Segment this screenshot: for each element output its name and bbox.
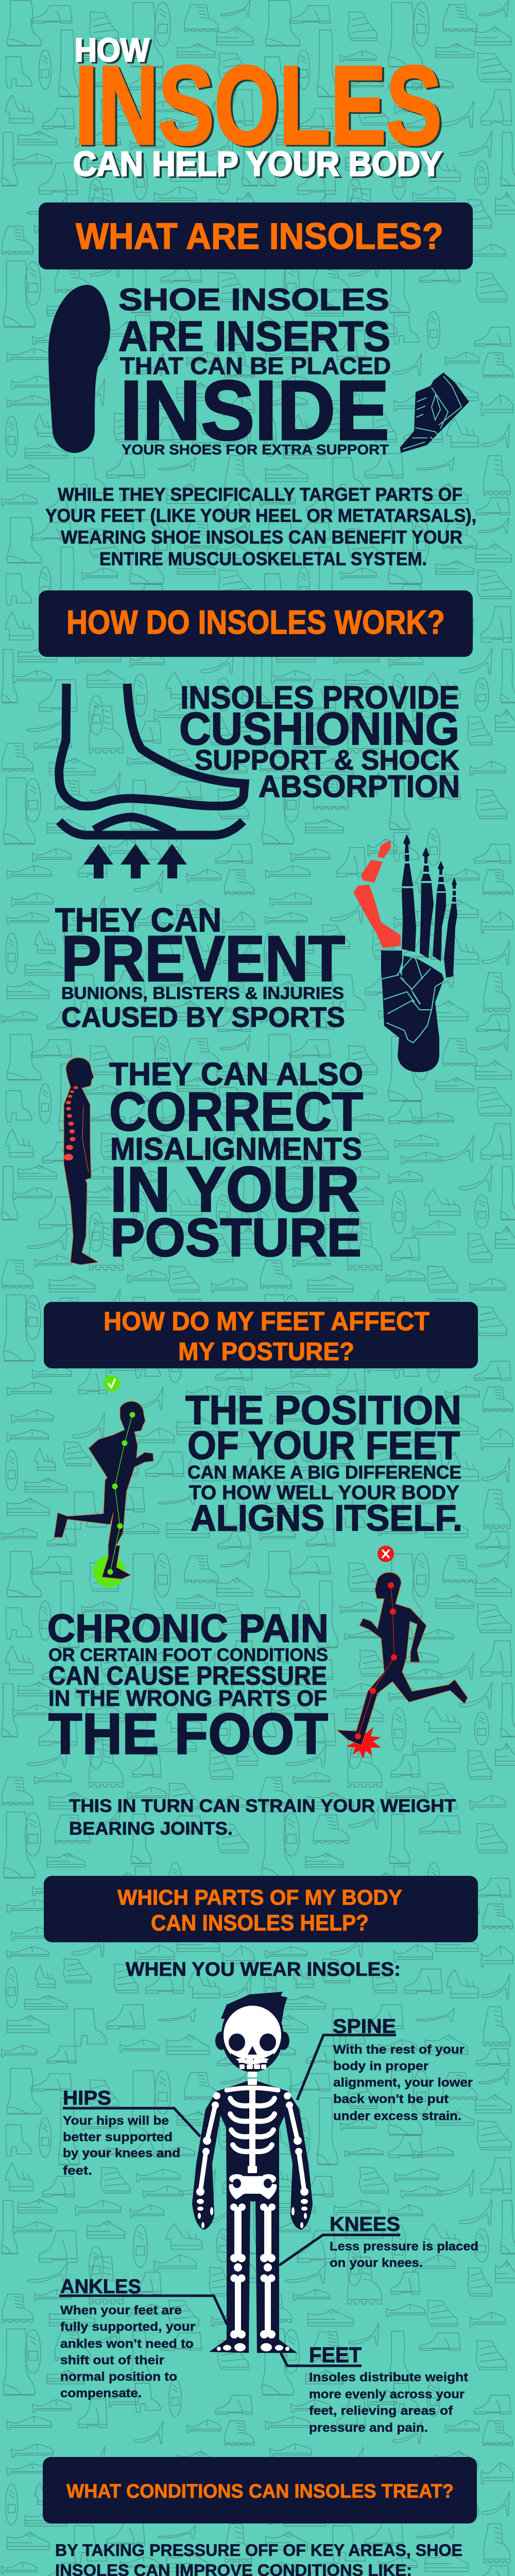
- callout: feet: more evenly across your: [309, 2387, 465, 2401]
- text block: by taking pressure off: [55, 2541, 462, 2576]
- section header: what are insoles: [39, 202, 473, 269]
- arrows: upward force: [83, 844, 187, 878]
- callout: spine: SPINE: [333, 2015, 396, 2038]
- callout: ankles: compensate.: [60, 2386, 142, 2400]
- callout: ankles: shift out of their: [60, 2353, 164, 2367]
- icon: running shoe: [400, 372, 469, 453]
- text block: position of your feet: CAN MAKE A BIG DIFFERENCE: [187, 1462, 461, 1483]
- section header: feet and posture: [44, 1302, 478, 1368]
- callout: knees: on your knees.: [330, 2256, 423, 2270]
- text block: insole definition: YOUR SHOES FOR EXTRA SUPPORT: [122, 442, 389, 457]
- callout: spine: alignment, your lower: [333, 2076, 473, 2090]
- callout: spine: back won't be put: [333, 2092, 449, 2106]
- text block: correct misalignments: IN YOUR: [110, 1154, 359, 1225]
- text block: cushioning: CUSHIONING: [179, 703, 459, 754]
- section header: feet and posture: MY POSTURE?: [178, 1338, 354, 1366]
- text block: while they specifically target: YOUR FEET (LIKE YOUR HEEL OR METATARSALS),: [45, 505, 476, 526]
- callout: ankles: fully supported, your: [60, 2320, 195, 2334]
- section header: feet and posture: HOW DO MY FEET AFFECT: [104, 1307, 430, 1336]
- text block: position of your feet: OF YOUR FEET: [187, 1423, 460, 1468]
- text block: correct misalignments: MISALIGNMENTS: [110, 1131, 362, 1166]
- text block: chronic pain: [47, 1606, 329, 1766]
- text block: chronic pain: OR CERTAIN FOOT CONDITIONS: [48, 1645, 328, 1665]
- text block: they can prevent: [55, 901, 345, 1033]
- text block: insole definition: [118, 282, 391, 457]
- callout: ankles: normal position to: [60, 2370, 177, 2384]
- callout: feet: feet, relieving areas of: [309, 2404, 453, 2418]
- callout: feet: [281, 2343, 468, 2435]
- text block: cushioning: ABSORPTION: [259, 769, 460, 804]
- text block: they can prevent: CAUSED BY SPORTS: [61, 1001, 345, 1033]
- icon: runner with good alignment: [54, 1401, 153, 1587]
- text block: while they specifically target: [45, 484, 476, 569]
- section header: what are insoles: WHAT ARE INSOLES?: [76, 216, 443, 257]
- text block: correct misalignments: [109, 1056, 363, 1268]
- text block: they can prevent: BUNIONS, BLISTERS & INJURIES: [61, 984, 344, 1003]
- callout: hips: better supported: [63, 2130, 173, 2144]
- icon: red cross badge: [377, 1546, 394, 1562]
- callout: knees: [279, 2213, 478, 2270]
- callout: hips: HIPS: [63, 2087, 111, 2109]
- text block: insole definition: THAT CAN BE PLACED: [120, 352, 391, 379]
- text block: chronic pain: THE FOOT: [48, 1702, 328, 1766]
- section header: how do insoles work: [39, 590, 473, 657]
- text block: while they specifically target: WEARING SHOE INSOLES CAN BENEFIT YOUR: [61, 527, 462, 548]
- callout: ankles: ANKLES: [60, 2276, 141, 2298]
- section header: what conditions: WHAT CONDITIONS CAN INSOLES TREAT?: [66, 2481, 454, 2502]
- callout: hips: [63, 2087, 200, 2178]
- callout: hips: Your hips will be: [63, 2114, 169, 2128]
- icon: standing figure with spine: [64, 1058, 98, 1265]
- callout: hips: by your knees and: [63, 2146, 180, 2160]
- callout: hips: feet.: [63, 2164, 92, 2178]
- text block: this in turn: [69, 1796, 456, 1839]
- title: CAN HELP YOUR BODY: [73, 145, 442, 183]
- icon: foot outline on insole: [59, 684, 245, 835]
- callout: ankles: When your feet are: [60, 2303, 182, 2317]
- icon: insole silhouette: [48, 285, 110, 453]
- text block: while they specifically target: WHILE THEY SPECIFICALLY TARGET PARTS OF: [58, 484, 462, 505]
- callout: spine: [297, 2015, 473, 2123]
- text block: cushioning: [179, 680, 460, 804]
- callout: spine: With the rest of your: [333, 2043, 465, 2057]
- text block: position of your feet: ALIGNS ITSELF.: [191, 1498, 462, 1539]
- text block: correct misalignments: POSTURE: [110, 1208, 362, 1268]
- text block: correct misalignments: THEY CAN ALSO: [109, 1056, 363, 1092]
- text block: chronic pain: CHRONIC PAIN: [47, 1606, 329, 1651]
- callout: spine: body in proper: [333, 2059, 428, 2073]
- text block: they can prevent: THEY CAN: [55, 901, 221, 939]
- callout: feet: Insoles distribute weight: [309, 2370, 468, 2384]
- section header: which parts of my body: WHICH PARTS OF MY BODY: [117, 1885, 402, 1909]
- section header: what conditions: [43, 2457, 477, 2523]
- section header: which parts of my body: [44, 1876, 478, 1942]
- text block: this in turn: THIS IN TURN CAN STRAIN YOUR WEIGHT: [69, 1796, 456, 1816]
- callout: knees: KNEES: [330, 2213, 400, 2235]
- text block: while they specifically target: ENTIRE MUSCULOSKELETAL SYSTEM.: [99, 548, 427, 569]
- text block: cushioning: SUPPORT & SHOCK: [195, 744, 459, 776]
- callout: feet: pressure and pain.: [309, 2421, 428, 2435]
- text block: insole definition: ARE INSERTS: [118, 312, 390, 360]
- text block: this in turn: BEARING JOINTS.: [69, 1819, 233, 1839]
- text block: position of your feet: TO HOW WELL YOUR BODY: [189, 1482, 459, 1504]
- callout: feet: FEET: [309, 2343, 362, 2367]
- text block: they can prevent: PREVENT: [61, 923, 345, 995]
- text block: position of your feet: THE POSITION: [185, 1387, 461, 1433]
- icon: green check badge: [104, 1375, 120, 1392]
- title: HOW: [75, 31, 150, 69]
- illustration: skeleton: [192, 1992, 313, 2353]
- text block: cushioning: INSOLES PROVIDE: [180, 680, 459, 716]
- text block: insole definition: INSIDE: [120, 363, 389, 457]
- callout: knees: Less pressure is placed: [330, 2240, 478, 2253]
- callout: ankles: ankles won’t need to: [60, 2337, 194, 2351]
- text block: insole definition: SHOE INSOLES: [118, 282, 389, 317]
- section header: which parts of my body: CAN INSOLES HELP?: [151, 1911, 369, 1936]
- icon: foot skeleton with bunion: [353, 834, 457, 1072]
- text block: by taking pressure off: BY TAKING PRESSURE OFF OF KEY AREAS, SHOE: [55, 2541, 462, 2560]
- text block: correct misalignments: CORRECT: [109, 1081, 363, 1142]
- icon: runner with foot pain: [337, 1572, 468, 1759]
- text: when you wear insoles: WHEN YOU WEAR INSOLES:: [126, 1959, 401, 1980]
- callout: spine: under excess strain.: [333, 2109, 461, 2123]
- text block: chronic pain: IN THE WRONG PARTS OF: [48, 1686, 327, 1711]
- callout: ankles: [59, 2276, 227, 2400]
- text block: chronic pain: CAN CAUSE PRESSURE: [48, 1661, 327, 1690]
- text block: position of your feet: [185, 1387, 462, 1539]
- section header: how do insoles work: HOW DO INSOLES WORK?: [66, 603, 445, 641]
